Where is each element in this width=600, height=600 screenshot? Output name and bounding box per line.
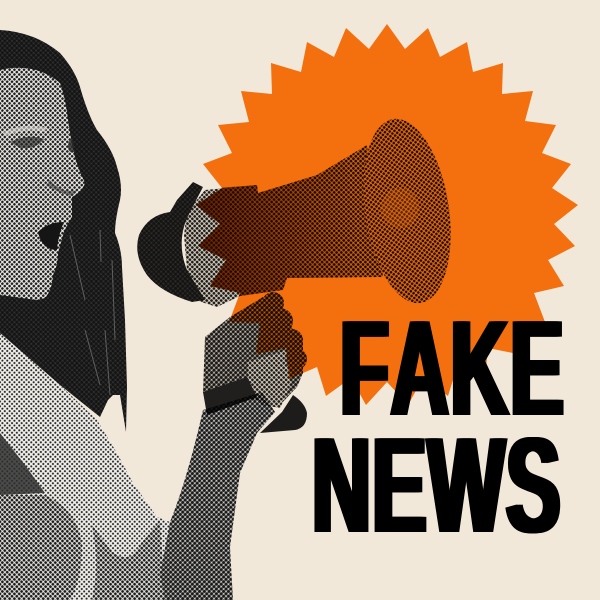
horn rim xyxy=(352,113,462,309)
back cap xyxy=(137,182,205,302)
orange starburst xyxy=(196,24,578,405)
face xyxy=(0,68,85,300)
shirt neckline shadow xyxy=(0,433,45,495)
eyebrow xyxy=(3,126,48,136)
eye xyxy=(10,137,44,148)
word: NEWS: NEWS xyxy=(312,409,562,561)
fingers xyxy=(262,292,307,370)
far eye xyxy=(68,140,74,152)
shirt lower panel xyxy=(0,495,82,600)
open mouth xyxy=(38,222,64,250)
thumb xyxy=(248,350,291,408)
hair strands xyxy=(70,230,115,395)
shirt xyxy=(0,333,170,600)
wrist strap xyxy=(203,377,257,415)
megaphone and hand, multiplied over the burst xyxy=(137,113,462,433)
woman xyxy=(0,30,275,600)
horn body xyxy=(184,145,383,307)
shirt right fold xyxy=(92,520,165,600)
hair xyxy=(0,30,127,432)
horn shading xyxy=(196,160,353,297)
word: FAKE: FAKE xyxy=(340,292,566,444)
nostril shading xyxy=(46,180,78,196)
driver in rim xyxy=(381,188,419,228)
handle grip xyxy=(260,395,307,433)
hand xyxy=(203,297,303,405)
forearm xyxy=(160,392,275,600)
title: FAKE NEWS xyxy=(312,292,566,561)
